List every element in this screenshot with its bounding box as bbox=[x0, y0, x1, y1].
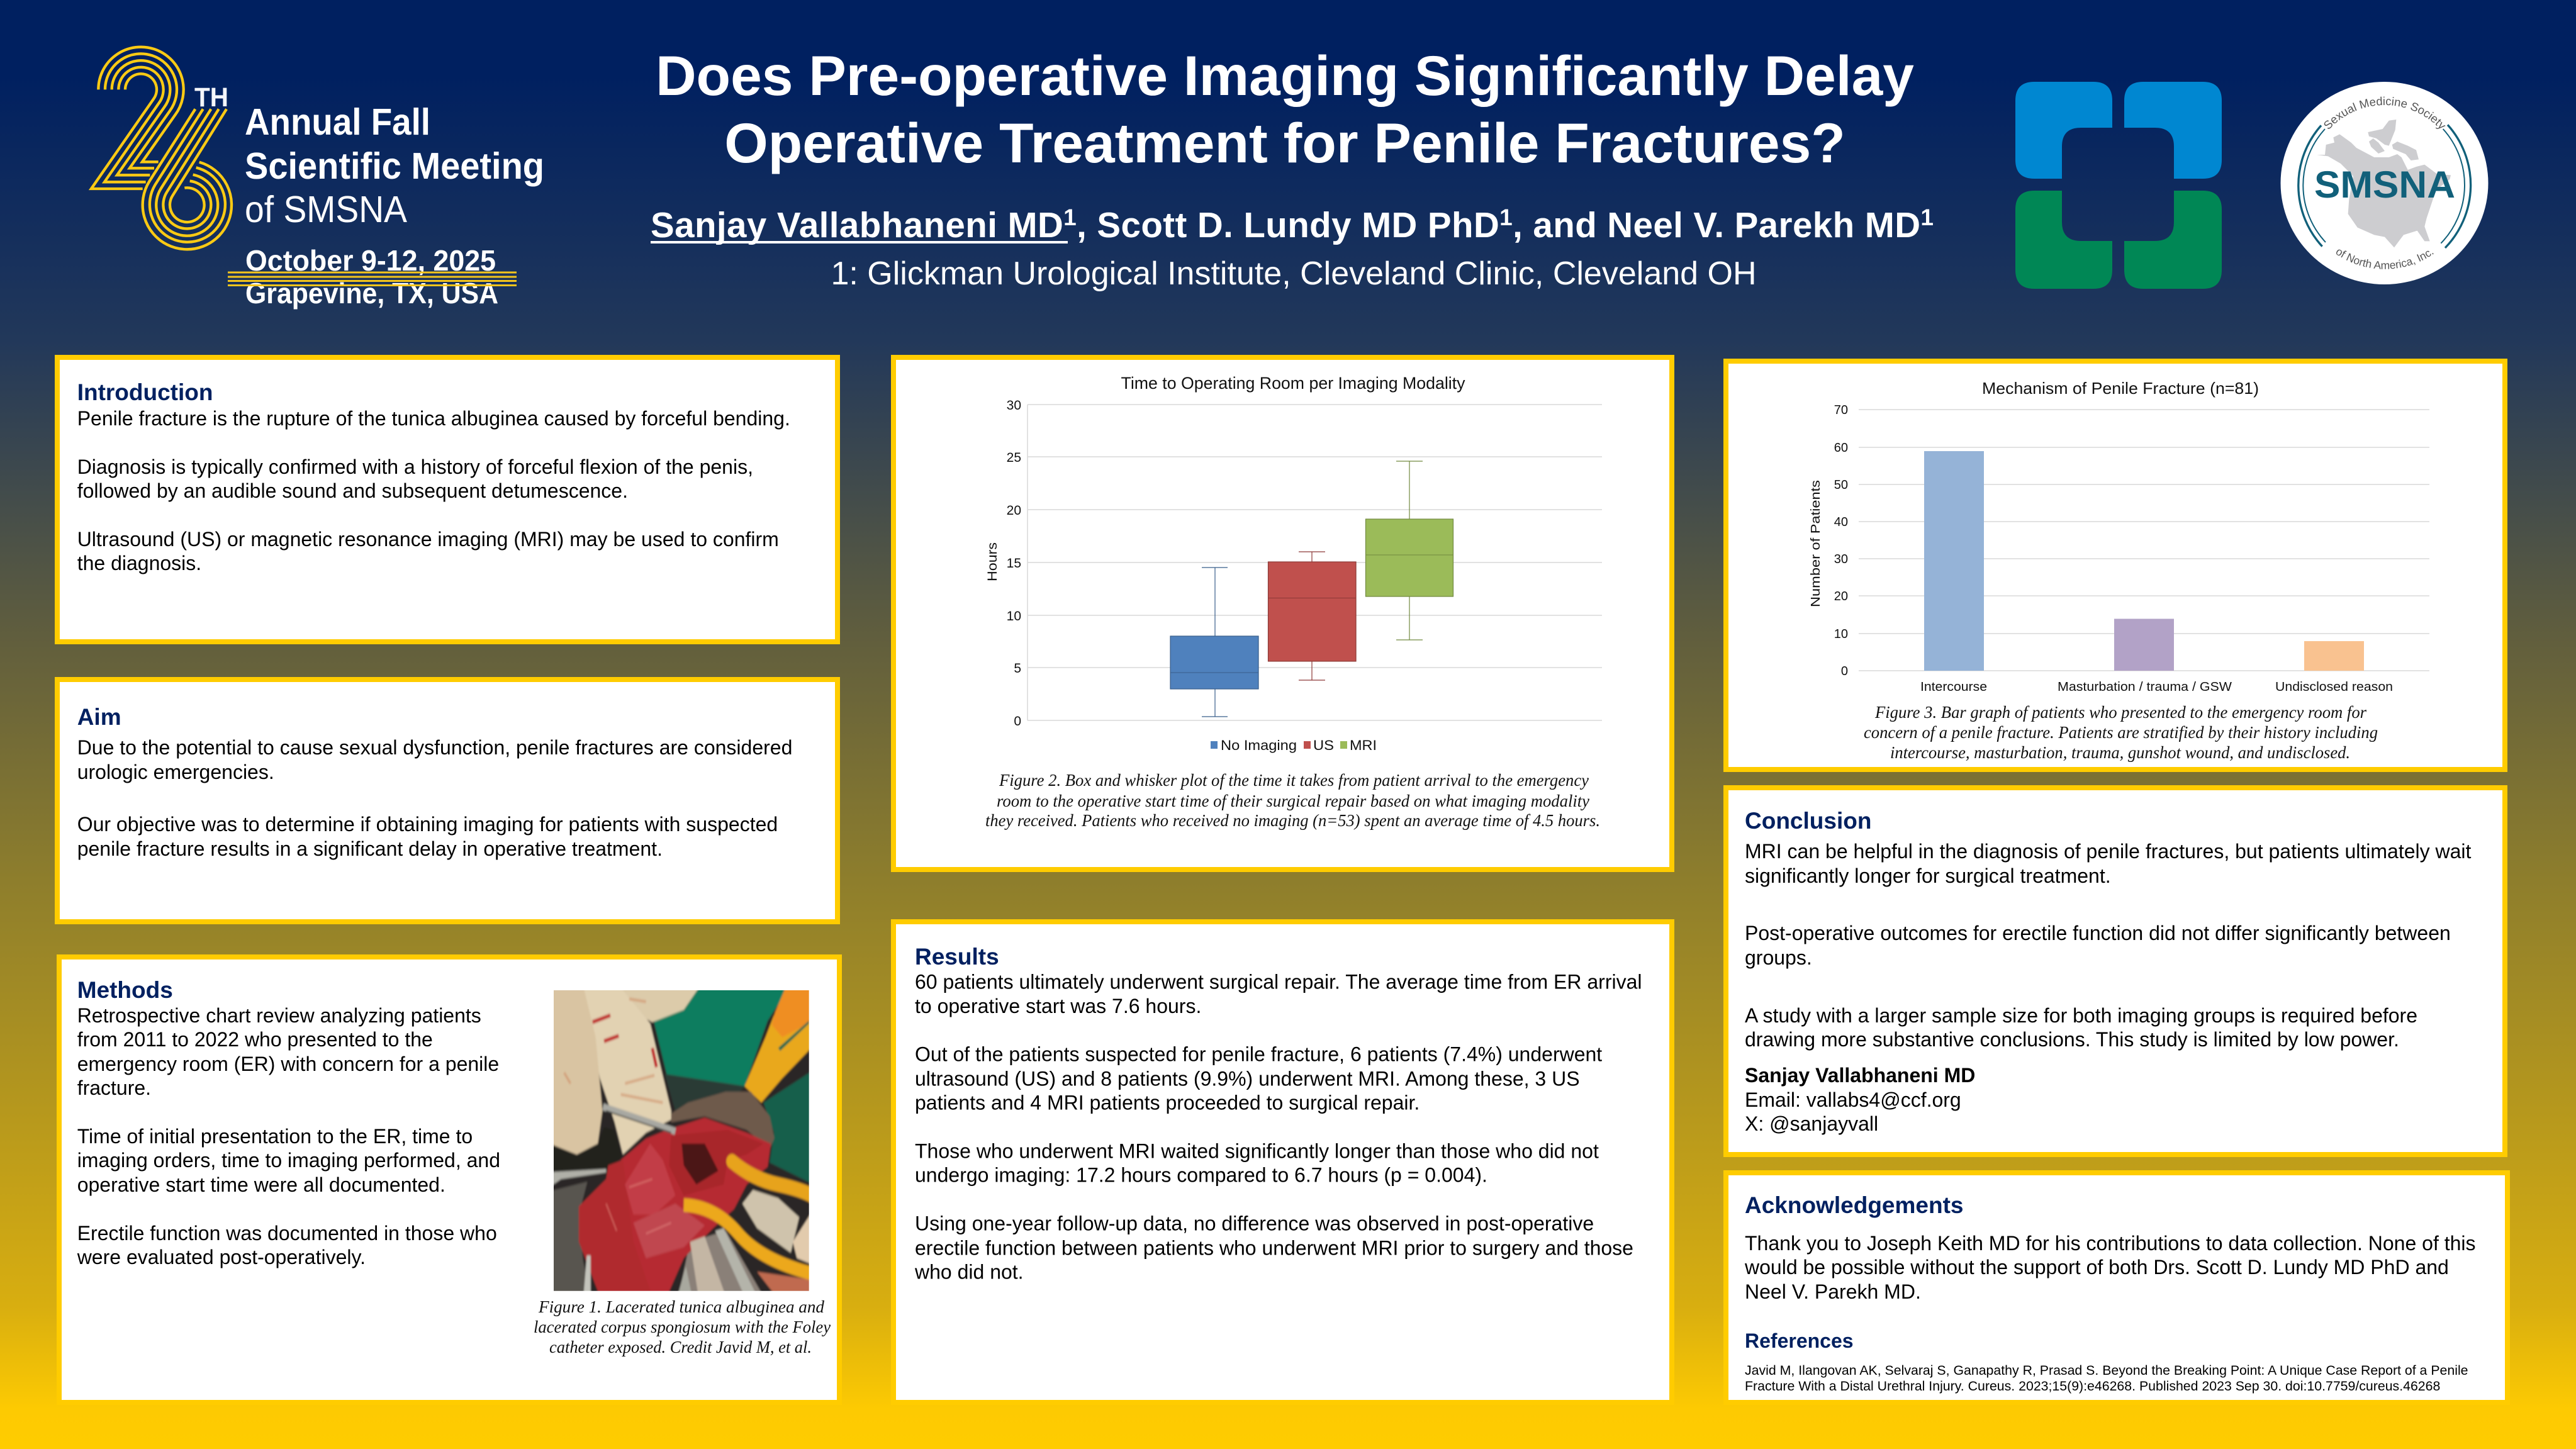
bar chart: 60 bbox=[1834, 441, 1848, 455]
panel: methods bbox=[59, 957, 839, 1402]
acknowledgements text bbox=[1744, 1232, 2476, 1303]
aim text bbox=[77, 736, 792, 860]
logo superscript TH: TH bbox=[194, 82, 228, 113]
introduction text: the diagnosis. bbox=[77, 552, 201, 574]
references text bbox=[1745, 1363, 2468, 1394]
methods text: operative start time were all documented. bbox=[77, 1173, 445, 1196]
figure 3 caption: intercourse, masturbation, trauma, gunshot wound, and undisclosed. bbox=[1890, 742, 2350, 762]
logo meeting name: Annual Fall bbox=[245, 101, 430, 143]
introduction text: followed by an audible sound and subsequent detumescence. bbox=[77, 479, 628, 502]
bar: intercourse bbox=[1924, 451, 1984, 671]
title: Does Pre-operative Imaging Significantly Delay bbox=[656, 44, 1914, 107]
authors: , Scott D. Lundy MD PhD bbox=[1077, 205, 1499, 245]
results text: Those who underwent MRI waited significantly longer than those who did not bbox=[915, 1140, 1599, 1163]
references text: Javid M, Ilangovan AK, Selvaraj S, Ganapathy R, Prasad S. Beyond the Breaking Point: A Unique Case Report of a Penile bbox=[1745, 1363, 2468, 1378]
panel: figure 3 bar chart bbox=[1726, 361, 2505, 769]
results text: Out of the patients suspected for penile fracture, 6 patients (7.4%) underwent bbox=[915, 1043, 1602, 1066]
logo meeting name: Scientific Meeting bbox=[245, 145, 544, 187]
logo numeral 26 bbox=[91, 47, 232, 249]
heading: methods: Methods bbox=[77, 977, 173, 1003]
results text: 60 patients ultimately underwent surgical repair. The average time from ER arrival bbox=[915, 970, 1642, 993]
methods text: from 2011 to 2022 who presented to the bbox=[77, 1028, 433, 1051]
conclusion text: Post-operative outcomes for erectile function did not differ significantly between bbox=[1745, 922, 2451, 944]
logo date and location: October 9-12, 2025 bbox=[245, 244, 496, 277]
acknowledgements text: would be possible without the support of both Drs. Scott D. Lundy MD PhD and bbox=[1744, 1256, 2449, 1278]
box and whisker chart: 20 bbox=[1007, 503, 1021, 518]
bar chart title: Mechanism of Penile Fracture (n=81) bbox=[1982, 379, 2259, 398]
panel: figure 2 box plot bbox=[893, 357, 1672, 870]
figure 1 caption: catheter exposed. Credit Javid M, et al. bbox=[549, 1337, 812, 1357]
seal acronym: SMSNA bbox=[2314, 164, 2455, 206]
results text: Using one-year follow-up data, no difference was observed in post-operative bbox=[915, 1212, 1594, 1234]
panel: introduction bbox=[57, 357, 837, 642]
seal curved name top: Sexual Medicine Society bbox=[2324, 97, 2445, 129]
panel: acknowledgements and references bbox=[1726, 1173, 2507, 1402]
logo meeting name bbox=[245, 101, 544, 230]
aim text: penile fracture results in a significant delay in operative treatment. bbox=[77, 837, 663, 860]
y axis label: number of patients: Number of Patients bbox=[1809, 480, 1823, 607]
contact details: Sanjay Vallabhaneni MD bbox=[1745, 1064, 1975, 1087]
figure 2 caption: Figure 2. Box and whisker plot of the time it takes from patient arrival to the emergency bbox=[999, 770, 1589, 790]
logo date and location: Grapevine, TX, USA bbox=[245, 277, 498, 310]
authors: Sanjay Vallabhaneni MD bbox=[651, 205, 1063, 245]
figure 2 caption bbox=[985, 770, 1600, 830]
figure 1 caption bbox=[534, 1297, 831, 1357]
authors: 1 bbox=[1499, 204, 1513, 230]
bar category labels bbox=[1920, 680, 2393, 694]
heading: aim: Aim bbox=[77, 704, 121, 730]
results text: ultrasound (US) and 8 patients (9.9%) underwent MRI. Among these, 3 US bbox=[915, 1067, 1580, 1090]
bar chart: 50 bbox=[1834, 478, 1848, 492]
bar chart: 20 bbox=[1834, 590, 1848, 603]
bar chart: 40 bbox=[1834, 515, 1848, 529]
authors: 1 bbox=[1920, 204, 1934, 230]
results text: patients and 4 MRI patients proceeded to surgical repair. bbox=[915, 1091, 1420, 1114]
box plot legend: US bbox=[1313, 737, 1334, 753]
bar category labels: Undisclosed reason bbox=[2275, 680, 2393, 694]
conclusion text bbox=[1745, 840, 2472, 1051]
bar chart: 0 bbox=[1841, 664, 1848, 678]
seal map of North America bbox=[2317, 120, 2451, 247]
affiliation: 1: Glickman Urological Institute, Cleveland Clinic, Cleveland OH bbox=[831, 255, 1757, 292]
logo date and location bbox=[228, 244, 517, 310]
panel: aim bbox=[57, 680, 837, 922]
box and whisker chart: 0 bbox=[1014, 714, 1021, 729]
figure 2 caption: room to the operative start time of their surgical repair based on what imaging modality bbox=[997, 791, 1590, 810]
methods text: fracture. bbox=[77, 1077, 151, 1099]
figure 3 caption: Figure 3. Bar graph of patients who presented to the emergency room for bbox=[1874, 702, 2366, 722]
conclusion text: groups. bbox=[1745, 946, 1812, 969]
aim text: urologic emergencies. bbox=[77, 761, 274, 783]
icon: SMSNA seal bbox=[2280, 82, 2488, 284]
heading: introduction: Introduction bbox=[77, 379, 213, 405]
title: Operative Treatment for Penile Fractures? bbox=[724, 111, 1845, 174]
heading: conclusion: Conclusion bbox=[1745, 808, 1871, 834]
bar category labels: Masturbation / trauma / GSW bbox=[2058, 680, 2232, 694]
box plot legend bbox=[1211, 737, 1377, 753]
box and whisker chart: 5 bbox=[1014, 661, 1021, 676]
results text: to operative start was 7.6 hours. bbox=[915, 995, 1201, 1017]
conference logo bbox=[91, 47, 544, 310]
methods text: imaging orders, time to imaging performed, and bbox=[77, 1149, 500, 1172]
methods text: Time of initial presentation to the ER, time to bbox=[77, 1125, 473, 1148]
results text: undergo imaging: 17.2 hours compared to 6.7 hours (p = 0.004). bbox=[915, 1164, 1487, 1187]
box and whisker chart bbox=[985, 398, 1602, 729]
box and whisker chart: 25 bbox=[1007, 450, 1021, 465]
figure 1 caption: Figure 1. Lacerated tunica albuginea and bbox=[538, 1297, 824, 1316]
panel: results bbox=[893, 922, 1672, 1402]
figure 1: surgical photograph bbox=[549, 985, 814, 1296]
figure 1 caption: lacerated corpus spongiosum with the Foley bbox=[534, 1317, 831, 1336]
results text: erectile function between patients who underwent MRI prior to surgery and those bbox=[915, 1237, 1633, 1260]
box: ultrasound bbox=[1268, 552, 1356, 680]
introduction text: Diagnosis is typically confirmed with a history of forceful flexion of the penis, bbox=[77, 456, 753, 478]
heading: acknowledgements: Acknowledgements bbox=[1745, 1192, 1963, 1218]
box and whisker chart: 30 bbox=[1007, 398, 1021, 413]
logo meeting name: of SMSNA bbox=[245, 189, 408, 230]
heading: references: References bbox=[1745, 1329, 1854, 1352]
bar: masturbation, trauma, GSW bbox=[2114, 619, 2174, 671]
introduction text: Ultrasound (US) or magnetic resonance imaging (MRI) may be used to confirm bbox=[77, 528, 779, 551]
box and whisker chart: 10 bbox=[1007, 609, 1021, 624]
authors: 1 bbox=[1063, 204, 1077, 230]
figure 2 caption: they received. Patients who received no imaging (n=53) spent an average time of 4.5 hours. bbox=[985, 810, 1600, 830]
box plot title: Time to Operating Room per Imaging Modality bbox=[1121, 374, 1465, 393]
methods text: Erectile function was documented in those who bbox=[77, 1222, 497, 1245]
contact details: Email: vallabs4@ccf.org bbox=[1745, 1088, 1961, 1111]
box and whisker chart: 15 bbox=[1007, 556, 1021, 571]
conclusion text: A study with a larger sample size for both imaging groups is required before bbox=[1745, 1004, 2417, 1027]
box plot legend: No Imaging bbox=[1221, 737, 1297, 753]
figure 3 caption: concern of a penile fracture. Patients are stratified by their history including bbox=[1864, 722, 2378, 742]
authors bbox=[651, 204, 1934, 245]
results text: who did not. bbox=[914, 1261, 1024, 1284]
box plot legend: MRI bbox=[1350, 737, 1377, 753]
methods text: emergency room (ER) with concern for a penile bbox=[77, 1053, 499, 1075]
bar chart bbox=[1809, 403, 2429, 694]
methods text: Retrospective chart review analyzing patients bbox=[77, 1004, 481, 1027]
references text: Fracture With a Distal Urethral Injury. Cureus. 2023;15(9):e46268. Published 2023 Sep 30. doi:10.7759/cureus.46268 bbox=[1745, 1379, 2440, 1394]
authors: , and Neel V. Parekh MD bbox=[1513, 205, 1920, 245]
box: MRI bbox=[1365, 461, 1453, 640]
methods text: were evaluated post-operatively. bbox=[77, 1246, 366, 1268]
box: no imaging bbox=[1170, 568, 1258, 717]
y axis label: hours: Hours bbox=[985, 542, 1000, 581]
bar chart: 70 bbox=[1834, 403, 1848, 417]
introduction text: Penile fracture is the rupture of the tunica albuginea caused by forceful bending. bbox=[77, 407, 790, 430]
aim text: Due to the potential to cause sexual dysfunction, penile fractures are considered bbox=[77, 736, 792, 759]
heading: results: Results bbox=[915, 944, 999, 970]
bar chart: 10 bbox=[1834, 627, 1848, 641]
bar chart: 30 bbox=[1834, 552, 1848, 566]
icon: Cleveland Clinic logo bbox=[2015, 82, 2222, 289]
methods text bbox=[77, 1004, 500, 1268]
acknowledgements text: Neel V. Parekh MD. bbox=[1745, 1280, 1921, 1303]
contact details: X: @sanjayvall bbox=[1745, 1112, 1878, 1135]
seal curved name bottom: of North America, Inc. bbox=[2336, 249, 2434, 269]
figure 3 caption bbox=[1864, 702, 2378, 762]
seal rings bbox=[2299, 125, 2471, 248]
contact details bbox=[1745, 1064, 1975, 1135]
bar category labels: Intercourse bbox=[1920, 680, 1987, 694]
conclusion text: MRI can be helpful in the diagnosis of penile fractures, but patients ultimately wait bbox=[1745, 840, 2472, 863]
conclusion text: significantly longer for surgical treatment. bbox=[1745, 864, 2111, 887]
panel: conclusion bbox=[1726, 788, 2505, 1155]
results text bbox=[914, 970, 1642, 1284]
introduction text bbox=[77, 407, 790, 574]
title bbox=[656, 44, 1914, 174]
acknowledgements text: Thank you to Joseph Keith MD for his contributions to data collection. None of this bbox=[1745, 1232, 2476, 1255]
bar: undisclosed reason bbox=[2304, 641, 2364, 671]
conclusion text: drawing more substantive conclusions. This study is limited by low power. bbox=[1745, 1028, 2399, 1051]
aim text: Our objective was to determine if obtaining imaging for patients with suspected bbox=[77, 813, 778, 836]
